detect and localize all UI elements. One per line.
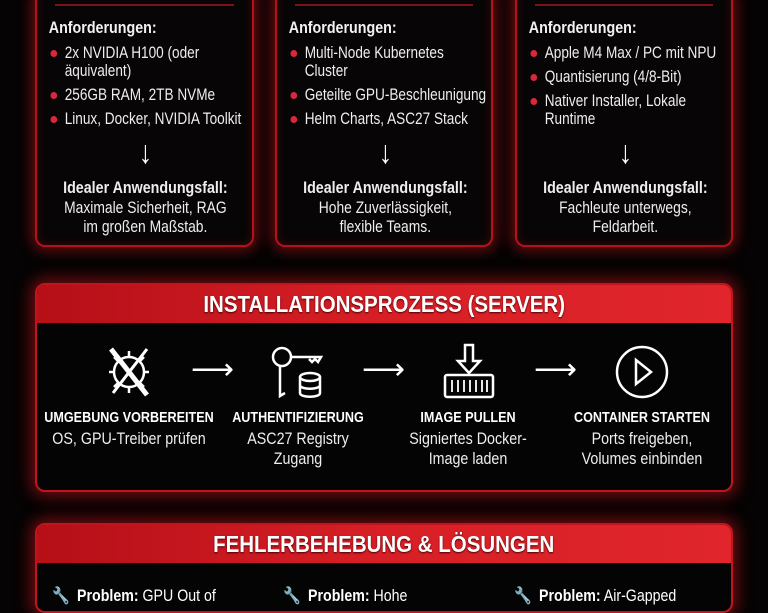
- list: server requirements: [50, 44, 242, 128]
- card: local requirements: [515, 0, 733, 247]
- text: ideal use case: [63, 178, 228, 236]
- icon: key and database: [272, 346, 324, 398]
- list: server requirements: 2x NVIDIA H100 (oder: [65, 44, 199, 62]
- list: cluster requirements: [290, 44, 486, 128]
- step: prepare: OS, GPU-Treiber prüfen: [52, 429, 206, 448]
- icon: image pull: [444, 344, 494, 398]
- step: auth: ASC27 Registry: [247, 429, 349, 448]
- list: cluster requirements: Geteilte GPU-Beschleunigung: [305, 86, 486, 104]
- list: local requirements: Apple M4 Max / PC mit NPU: [545, 44, 716, 62]
- heading: requirements: Anforderungen:: [529, 18, 637, 37]
- step: prepare: [44, 409, 214, 448]
- text: ideal use case: Maximale Sicherheit, RAG: [64, 198, 227, 216]
- step: pull: [409, 409, 527, 468]
- heading: troubleshooting: [37, 525, 731, 563]
- step: start: [574, 409, 710, 468]
- list: server requirements: 256GB RAM, 2TB NVMe: [65, 86, 215, 104]
- arrow: step 2 to 3: ⟶: [362, 353, 405, 386]
- text: ideal use case: [543, 178, 708, 236]
- text: ideal use case: Idealer Anwendungsfall:: [543, 178, 708, 197]
- card: server requirements: [35, 0, 254, 247]
- arrow: step 3 to 4: ⟶: [534, 353, 577, 386]
- step: start: Volumes einbinden: [582, 448, 702, 468]
- list: local requirements: Runtime: [545, 110, 595, 128]
- text: ideal use case: flexible Teams.: [340, 218, 431, 236]
- card: cluster requirements: [275, 0, 493, 247]
- text: ideal use case: Fachleute unterwegs,: [559, 198, 692, 216]
- text: ideal use case: Hohe Zuverlässigkeit,: [319, 198, 452, 216]
- list: cluster requirements: Helm Charts, ASC27 Stack: [305, 110, 468, 128]
- list: local requirements: Nativer Installer, Lokale: [545, 92, 686, 110]
- heading: requirements: Anforderungen:: [49, 18, 157, 37]
- text: ideal use case: Idealer Anwendungsfall:: [303, 178, 468, 197]
- problem 2: 🔧 Problem: Hohe: [283, 587, 407, 605]
- text: ideal use case: Idealer Anwendungsfall:: [63, 178, 228, 197]
- heading: requirements: Anforderungen:: [289, 18, 397, 37]
- icon: play: [616, 346, 668, 398]
- step: auth: [232, 409, 364, 468]
- heading: installation: INSTALLATIONSPROZESS (SERVER): [203, 291, 565, 317]
- text: ideal use case: Feldarbeit.: [593, 218, 658, 236]
- problem 1: 🔧 Problem: GPU Out of: [52, 587, 216, 605]
- heading: troubleshooting: FEHLERBEHEBUNG & LÖSUNGEN: [213, 531, 555, 557]
- list: server requirements: äquivalent): [65, 62, 131, 80]
- arrow: down: ↓: [139, 134, 152, 170]
- step: start: Ports freigeben,: [592, 429, 692, 448]
- list: local requirements: Quantisierung (4/8-Bit): [545, 68, 682, 86]
- icon: tools: [109, 348, 149, 396]
- panel: troubleshooting: [35, 523, 733, 613]
- step: start: CONTAINER STARTEN: [574, 409, 710, 426]
- text: ideal use case: im großen Maßstab.: [83, 218, 207, 236]
- list: cluster requirements: Multi-Node Kubernetes: [305, 44, 444, 62]
- problem 3: 🔧 Problem: Air-Gapped: [514, 587, 676, 605]
- text: ideal use case: [303, 178, 468, 236]
- arrow: down: ↓: [379, 134, 392, 170]
- step: prepare: UMGEBUNG VORBEREITEN: [44, 409, 214, 426]
- list: local requirements: [530, 44, 716, 128]
- arrow: down: ↓: [619, 134, 632, 170]
- step: auth: Zugang: [274, 448, 322, 468]
- list: cluster requirements: Cluster: [305, 62, 348, 80]
- arrow: step 1 to 2: ⟶: [191, 353, 234, 386]
- step: auth: AUTHENTIFIZIERUNG: [232, 409, 364, 426]
- step: pull: Image laden: [429, 448, 507, 468]
- list: server requirements: Linux, Docker, NVIDIA Toolkit: [65, 110, 241, 128]
- heading: installation: [37, 285, 731, 323]
- panel: installation process: [35, 283, 733, 492]
- step: pull: Signiertes Docker-: [409, 429, 527, 448]
- step: pull: IMAGE PULLEN: [420, 409, 516, 426]
